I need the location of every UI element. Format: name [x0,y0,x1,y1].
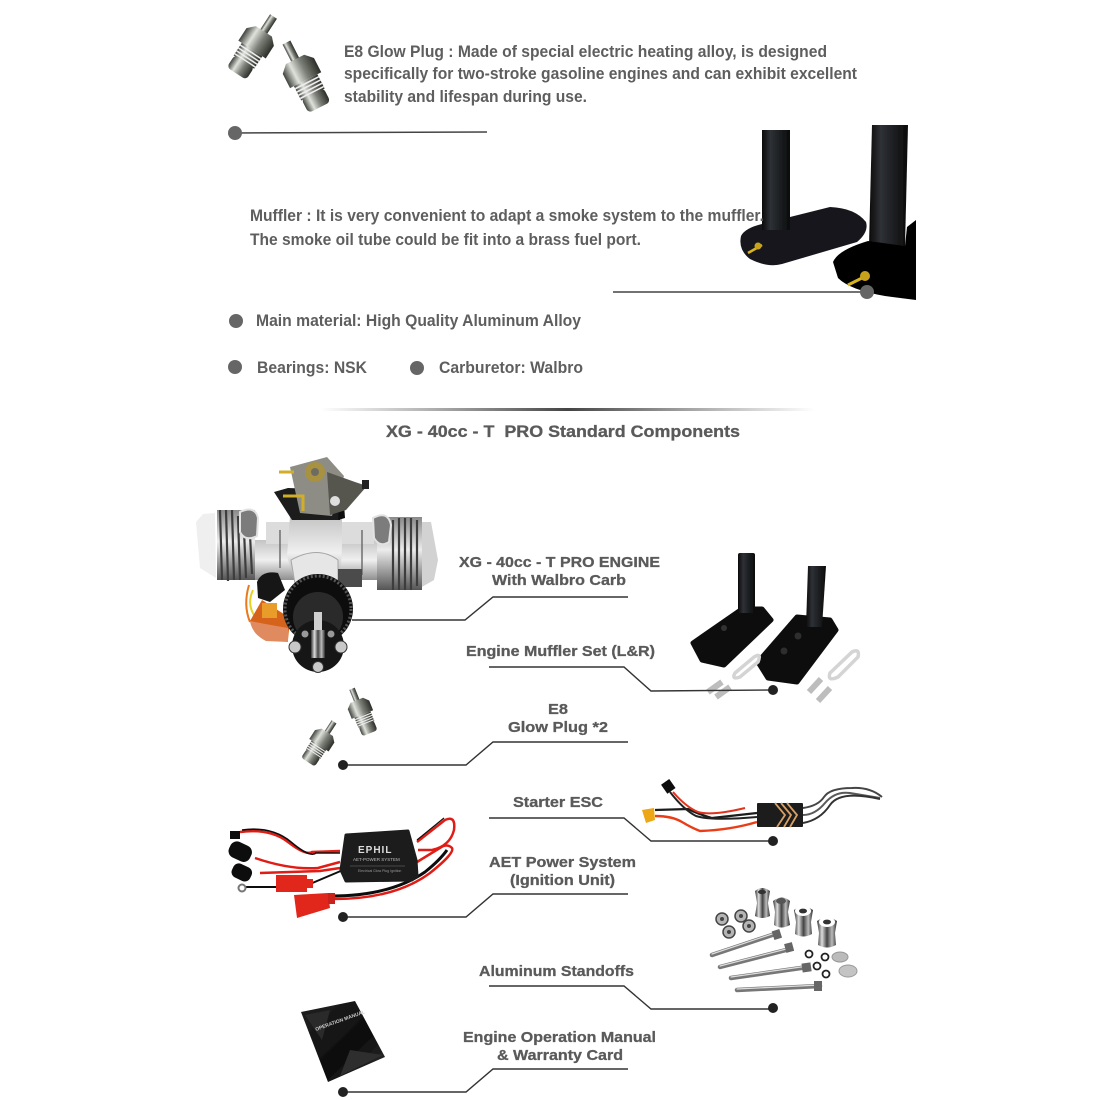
bullet: carburetor: Carburetor: Walbro [439,359,583,377]
leader line: aluminum standoffs [489,986,778,1013]
right ghost fins [420,522,438,588]
label: glow plug: E8 [548,701,568,718]
label: engine [459,554,660,589]
label: engine: XG - 40cc - T PRO ENGINE [459,554,660,571]
connecting bar [253,540,387,580]
illustration: black mufflers with smoke ports [740,125,916,300]
left ghost fins [196,513,216,578]
icon: glow plugs (top) [223,8,335,115]
crankcase [287,516,342,590]
illustration: engine muffler set [693,553,858,701]
leader line: AET power system [338,894,628,922]
leader line: operation manual [338,1069,628,1097]
label: aluminum standoffs: Aluminum Standoffs [479,963,634,980]
illustration: AET power system: AET-POWER SYSTEM [353,857,400,862]
bullet: main material: Main material: High Quality Aluminum Alloy [256,312,582,330]
illustration: operation manual: OPERATION MANUAL [315,1009,366,1033]
illustration: aluminum standoffs and hardware [712,888,857,991]
text: muffler description: The smoke oil tube could be fit into a brass fuel port. [250,231,641,249]
label: engine: With Walbro Carb [492,572,626,589]
propeller hub [292,620,344,672]
bullet: bearings: Bearings: NSK [257,359,367,377]
text: muffler description: Muffler : It is very convenient to adapt a smoke system to the muffler. [250,207,764,225]
text: E8 glow plug description: stability and lifespan during use. [344,88,587,106]
illustration: engine [196,457,438,672]
illustration: AET power system: Electrical Glow Plug Ignition [358,869,401,873]
callout line: muffler [613,285,874,299]
text: E8 glow plug description: specifically for two-stroke gasoline engines and can exhibit excellent [344,65,857,83]
icon: glow plugs (components) [298,684,381,768]
label: AET power system: (Ignition Unit) [510,872,615,889]
callout line: glow plug [228,126,487,140]
label: glow plug [508,701,608,736]
carburetor [290,457,344,516]
label: glow plug: Glow Plug *2 [508,719,608,736]
left cylinder [217,510,255,580]
label: starter ESC: Starter ESC [513,794,603,811]
text: E8 glow plug description [344,43,857,106]
intake block [274,488,345,520]
illustration: AET power system: EPHIL [358,845,392,856]
ignition wires and orange coil [246,585,250,622]
heading: standard components: XG - 40cc - T PRO Standard Components [386,422,740,441]
label: AET power system: AET Power System [489,854,636,871]
leader line: engine [352,597,628,620]
label: operation manual: Engine Operation Manual [463,1029,656,1046]
leader line: muffler set [489,667,778,695]
label: AET power system [489,854,636,889]
illustration: AET power system [226,818,454,918]
leader line: glow plug [338,742,628,770]
leader line: starter ESC [489,818,778,846]
label: operation manual [463,1029,656,1064]
text: E8 glow plug description: E8 Glow Plug : Made of special electric heating alloy, is designed [344,43,827,61]
right cylinder [377,517,422,590]
label: operation manual: & Warranty Card [497,1047,623,1064]
text: muffler description [250,207,764,249]
label: muffler set: Engine Muffler Set (L&R) [466,643,655,660]
illustration: operation manual [301,1001,385,1082]
illustration: starter ESC [642,779,882,831]
flywheel [283,574,353,644]
